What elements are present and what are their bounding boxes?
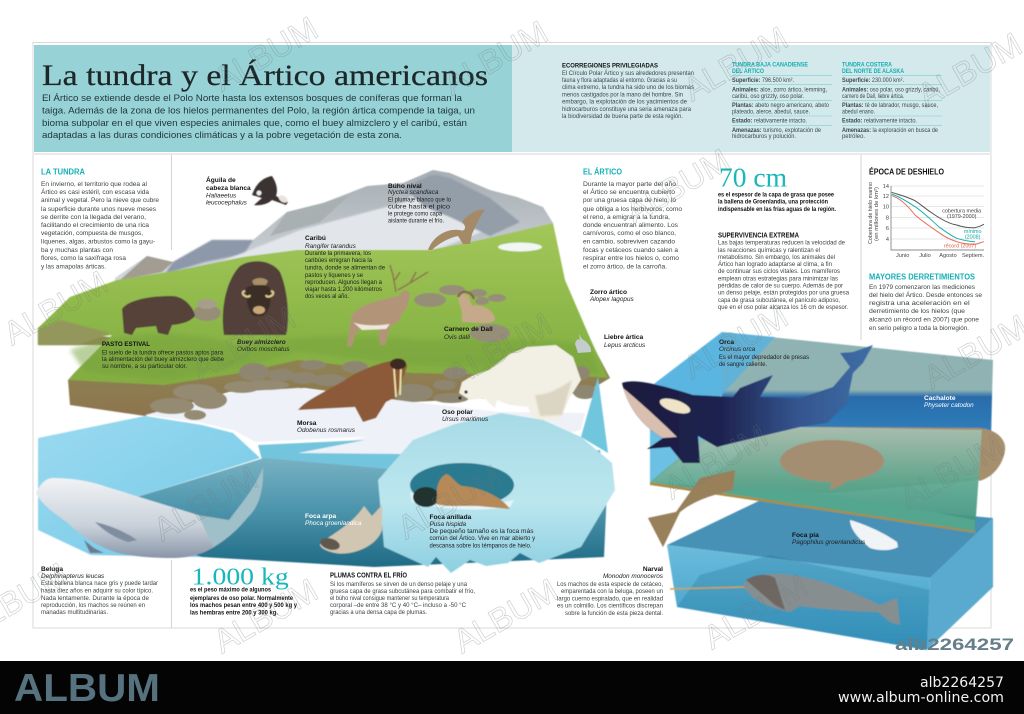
table: tundra baja canadiense: plateado, alerce, abedul, sauce. [732, 109, 810, 116]
label: narval: es un colmillo. Los científicos discrepan [557, 602, 663, 610]
label: orca: Orca [719, 339, 734, 346]
text: ecorregiones privilegiadas: El Círculo Polar Ártico y sus alrededores presentan [562, 68, 694, 77]
snow shelf [145, 388, 585, 456]
label: caribu: reproducen. Algunos llegan a [305, 279, 382, 286]
label: foca pia [792, 532, 866, 546]
label: foca anillada: Pusa hispida [430, 521, 467, 528]
label: narval: Los machos de esta especie de cetáceo, [557, 581, 663, 588]
chart: epoca de deshielo: Julio [919, 253, 931, 259]
page frame [33, 42, 991, 628]
label: buho nival: Nyctea scandiaca [388, 189, 439, 196]
chart: epoca de deshielo: (1979-2000) [947, 214, 977, 220]
text: plumas contra el frio: Si los mamíferos se sirven de un denso pelaje y una [330, 581, 467, 588]
text: ecorregiones privilegiadas: hidrocarburos constituye una seria amenaza para [562, 106, 691, 113]
text: mayores derretimientos: del hielo del Ártico. Desde entonces se [869, 290, 982, 299]
label: buho nival: cubre hasta el pico [388, 204, 451, 211]
watermarks: ALBUM [207, 571, 324, 660]
text: supervivencia extrema: un denso pelaje, están protegidos por una gruesa [718, 290, 849, 296]
text: ecorregiones privilegiadas: la biodiversidad de buena parte de esta región. [562, 113, 683, 120]
label: caribu: Rangifer tarandus [305, 243, 357, 250]
label: beluga: hasta diez años en adquirir su color típico. [41, 588, 153, 594]
chart: epoca de deshielo: récord (2007) [944, 244, 976, 250]
chart: epoca de deshielo: 8 [886, 216, 889, 222]
shore rocks [239, 360, 597, 403]
text: ecorregiones privilegiadas: fauna y flora adaptadas al entorno. Gracias a su [562, 77, 677, 84]
label: pasto estival [102, 341, 224, 370]
chart: epoca de deshielo: cobertura media [942, 208, 981, 214]
polar bear [458, 345, 581, 420]
sperm whale [648, 427, 1005, 547]
chart: epoca de deshielo: Septiem. [962, 253, 984, 259]
label: morsa: Odobenus rosmarus [297, 427, 356, 434]
seabed [650, 427, 982, 531]
caribou [347, 265, 428, 346]
text: plumas contra el frio: el búho nival consigue mantener su temperatura [330, 595, 449, 602]
label: caribu: tundra, donde se alimentan de [305, 264, 385, 272]
top block surface and left wall [650, 332, 722, 482]
label: el artico text: carnívoros, como el oso blanco, [583, 230, 676, 237]
watermarks: ALBUM [619, 141, 736, 230]
text: supervivencia extrema: que en el oso polar alcanza los 16 cm de espesor. [718, 304, 848, 311]
table: tundra costera: carnero de Dall, liebre ártica. [842, 93, 904, 100]
label: orca: Orcinus orca [719, 346, 756, 353]
label: el artico text: el reno, a emigrar a la tundra, [583, 214, 670, 221]
table: tundra costera: petróleo. [842, 133, 865, 140]
watermarks: ALBUM [207, 9, 324, 98]
deep water section [137, 450, 607, 567]
whale tail outside water [648, 470, 735, 547]
label: foca pia: Pagophilus groenlandicus [792, 539, 866, 546]
label: foca arpa: Phoca groenlandica [305, 520, 362, 527]
table: tundra baja canadiense: DEL ÁRTICO [732, 66, 764, 75]
label: el artico text: respirar entre los hielos o, como [583, 255, 679, 262]
label: el artico text: Durante la mayor parte del año [583, 181, 676, 188]
label: buho nival: El plumaje blanco que lo [388, 197, 451, 204]
orca [622, 345, 873, 463]
stat: 1.000 kg: es el peso máximo de algunos [190, 586, 271, 594]
stat: 1.000 kg: ejemplares de oso polar. Normalmente [190, 595, 293, 602]
label: buho nival: aislante durante el frío. [388, 218, 444, 225]
table: tundra costera: Superficie: 230.000 km². [842, 77, 904, 84]
table: tundra costera [842, 62, 942, 140]
watermarks: ALBUM [893, 427, 1010, 516]
stat: 1.000 kg: las hembras entre 200 y 300 kg. [190, 610, 278, 616]
footer bar [0, 661, 1024, 714]
cave shadow [413, 487, 439, 507]
panel: ecoregions background [512, 45, 990, 152]
intro text: bioma subpolar en el que viven especies animales que, como el buey almizclero y el caribú, están [42, 118, 467, 129]
label: carnero de dall: Carnero de Dall [444, 326, 493, 333]
harp seal pup [850, 520, 898, 550]
label: foca anillada: Foca anillada [430, 514, 472, 521]
text: mayores derretimientos: registra una aceleración en el [869, 300, 970, 307]
illustration: tundra and arctic shore [36, 170, 615, 573]
image id over artwork: alb2264257 [895, 635, 1014, 654]
header band [34, 45, 990, 152]
lower rocks [150, 380, 289, 420]
label: foca anillada: descansa sobre los témpanos de hielo. [430, 543, 532, 550]
footer logo: ALBUM [14, 667, 160, 710]
label: caribu [305, 235, 385, 300]
label: cachalote: Physeter catodon [924, 402, 974, 409]
table: tundra baja canadiense: Estado: relativamente intacto. [732, 118, 807, 125]
text: mayores derretimientos [869, 271, 982, 332]
label: narval: largo cuerno espiralado, que en realidad [557, 596, 663, 602]
label: el artico text: que obliga a los herbívoros, como [583, 206, 682, 213]
label: aguila: leucocephalus [206, 200, 248, 206]
label: beluga: Delphinapterus leucas [41, 573, 105, 580]
label: orca: Es el mayor depredador de presas [719, 354, 809, 361]
label: la tundra text: LA TUNDRA [41, 167, 85, 177]
label: pasto estival: la alimentación del buey almizclero que debe [102, 356, 224, 363]
chart heading: ÉPOCA DE DESHIELO [869, 168, 944, 177]
label: el artico text: el Ártico se encuentra cubierto [583, 187, 675, 196]
intro text: adaptadas a las duras condiciones climáticas y a la pobre vegetación de esta zona. [42, 130, 402, 141]
grass [38, 223, 608, 385]
label: caribu: caribúes emigran hacia la [305, 257, 372, 264]
chart: epoca de deshielo: mínimo [964, 229, 982, 235]
table: tundra costera: Plantas: té de labrador, musgo, sauce, [842, 102, 938, 109]
narwhal [670, 574, 900, 625]
label: la tundra text: ba y muchas plantas con [41, 247, 113, 254]
label: foca arpa: Foca arpa [305, 513, 336, 520]
text: plumas contra el frio [330, 570, 475, 616]
label: buey almizclero: Buey almizclero [237, 339, 286, 346]
text: supervivencia extrema: capa de grasa subcutánea, el panículo adiposo, [718, 297, 840, 304]
label: foca anillada [430, 514, 536, 550]
table: tundra baja canadiense: caribú, oso grizzly, oso polar. [732, 93, 804, 100]
label: narval: emparentada con la beluga, poseen un [561, 588, 663, 595]
text: mayores derretimientos: derretimiento de los hielos (que [869, 308, 965, 315]
top block back wall [722, 332, 993, 470]
eagle [252, 176, 289, 205]
label: liebre artica: Liebre ártica [604, 334, 644, 341]
label: la tundra text: Ártico es casi estéril, con escasa vida [41, 187, 149, 196]
label: la tundra text: líquenes, algas, arbustos como la gayu- [41, 238, 155, 246]
label: la tundra text: animal y vegetal. Pero la nieve que cubre [41, 197, 159, 204]
label: caribu: Caribú [305, 235, 326, 242]
label: narval [557, 566, 664, 617]
owl [428, 210, 485, 250]
label: morsa: Morsa [297, 420, 317, 427]
illustration: ocean layers [622, 332, 1005, 650]
label: orca [719, 339, 809, 368]
label: buho nival [388, 183, 451, 225]
label: oso polar [442, 409, 489, 423]
label: carnero de dall: Ovis dalli [444, 334, 471, 341]
beluga [36, 467, 263, 558]
label: narval: sobre la función de esta pieza dental. [565, 610, 663, 617]
label: la tundra text: se derrite con la llegada del verano, [41, 214, 146, 221]
text: supervivencia extrema: Ártico han logrado adaptarse al clima, a fin [718, 259, 832, 268]
table: tundra baja canadiense: Superficie: 796.500 km². [732, 77, 794, 84]
label: foca arpa [305, 513, 362, 527]
label: orca: de sangre caliente. [719, 361, 767, 368]
curve: minimum 2008 [892, 194, 975, 242]
table: tundra costera: Amenazas: la exploración en busca de [842, 127, 938, 134]
text: supervivencia extrema [718, 230, 849, 311]
label: cachalote [924, 395, 974, 409]
label: narval: Monodon monoceros [603, 573, 664, 580]
stat: 70 cm: 70 cm [719, 163, 787, 193]
label: buey almizclero: Ovibos moschatus [237, 346, 290, 353]
lower block right wall [927, 518, 993, 650]
text: mayores derretimientos: en serio peligro a toda la biorregión. [869, 325, 969, 332]
lower block top face [667, 497, 993, 578]
watermarks: ALBUM [697, 567, 814, 656]
grass shading [70, 334, 600, 380]
lower block front [667, 545, 930, 650]
walrus [298, 358, 407, 422]
label: cachalote: Cachalote [924, 395, 956, 402]
text: plumas contra el frio: gruesa capa de grasa subcutánea para combatir el frío, [330, 588, 475, 595]
label: foca anillada: común del Ártico. Vive en mar abierto y [430, 533, 536, 542]
text: supervivencia extrema: las reacciones químicas y ralentizan el [718, 247, 820, 254]
watermarks: ALBUM [447, 571, 564, 660]
text: mayores derretimientos: En 1979 comenzaron las mediciones [869, 284, 976, 291]
chart: epoca de deshielo: 10 [883, 205, 889, 211]
label: caribu: viajar hasta 1.200 kilómetros [305, 286, 382, 293]
table: tundra costera: Animales: oso polar, oso grizzly, caribú, [842, 86, 940, 94]
label: el artico text: EL ÁRTICO [583, 167, 622, 177]
table: tundra baja canadiense: Plantas: abeto negro americano, abeto [732, 102, 829, 109]
arctic hare [575, 334, 591, 353]
label: beluga: Beluga [41, 566, 63, 573]
snow patch on grass [498, 242, 542, 252]
table: tundra costera: DEL NORTE DE ALASKA [842, 68, 904, 75]
stat: 70 cm: la ballena de Groenlandia, una protección [718, 198, 828, 206]
text: plumas contra el frio: corporal –de entre 38 °C y 40 °C– incluso a -50 °C [330, 601, 466, 609]
label: beluga: manadas multitudinarias. [41, 609, 108, 616]
label: zorro artico [589, 289, 635, 303]
stat: 1.000 kg: los machos pesan entre 400 y 500 kg y [190, 602, 297, 609]
label: zorro artico: Zorro ártico [590, 289, 627, 296]
harp seal [319, 505, 382, 554]
upper rocks [193, 285, 510, 342]
seabed lower strip [650, 482, 975, 531]
label: la tundra text: la superficie durante unos nueve meses [41, 206, 157, 213]
label: el artico text [583, 167, 682, 270]
label: beluga: Esta ballena blanca nace gris y puede tardar [41, 580, 159, 587]
watermarks: ALBUM [391, 457, 508, 546]
label: liebre artica [604, 334, 646, 349]
text: supervivencia extrema: emplean otras estrategias para minimizar las [718, 276, 839, 282]
mountains [115, 170, 553, 295]
water surface [38, 416, 260, 557]
text: mayores derretimientos: alcanzó un récord en 2007) que pone [869, 316, 979, 324]
label: el artico text: donde encuentran alimento. Los [583, 222, 679, 229]
dall sheep [458, 292, 495, 323]
ice cave [410, 463, 514, 507]
cave floor [410, 492, 514, 510]
label: el artico text: por una gruesa capa de hielo, lo [583, 197, 676, 204]
intro text [42, 93, 475, 141]
chart: epoca de deshielo: Junio [896, 253, 909, 259]
watermarks: ALBUM [147, 459, 264, 548]
label: pasto estival: El suelo de la tundra ofrece pastos aptos para [102, 350, 223, 356]
label: buho nival: Búho nival [388, 183, 422, 190]
label: oso polar: Oso polar [442, 409, 473, 416]
label: la tundra text: En invierno, el territorio que rodea al [41, 181, 148, 188]
stat: 70 cm [718, 163, 836, 213]
label: caribu: Durante la primavera, los [305, 250, 371, 257]
whale flipper [830, 473, 860, 490]
intro text: taiga. Además de la zona de los hielos permanentes del Polo, la región ártica compende la taiga, un [42, 106, 475, 116]
seabed sand edge [650, 482, 975, 533]
label: la tundra text: flores, como la saxífraga rosa [41, 255, 126, 262]
label: carnero de dall [444, 326, 493, 341]
chart: epoca de deshielo: Cobertura de hielo marino [868, 182, 874, 244]
stat: 1.000 kg: 1.000 kg [192, 564, 289, 590]
label: el artico text: en cambio, sobreviven cazando [583, 238, 675, 246]
table: tundra baja canadiense: Animales: alce, zorro ártico, lemming, [732, 86, 827, 94]
table: tundra costera: TUNDRA COSTERA [842, 62, 892, 69]
musk ox large [223, 261, 288, 335]
title: La tundra y el Ártico americanos [42, 59, 488, 92]
label: aguila: cabeza blanca [206, 185, 251, 192]
blue channel band [258, 440, 401, 470]
label: zorro artico: Alopex lagopus [589, 296, 635, 303]
label: beluga [41, 566, 159, 616]
label: buey almizclero [237, 339, 290, 353]
label: caribu: pastos y líquenes y se [305, 272, 363, 279]
chart: epoca de deshielo: 4 [886, 237, 889, 243]
label: foca anillada: De pequeño tamaño es la foca más [430, 528, 534, 535]
label: buho nival: le protege como capa [388, 211, 442, 218]
panel: title background [34, 45, 512, 152]
soil block [38, 330, 610, 416]
label: pasto estival: su nombre, a su particular olor. [102, 363, 187, 370]
label: la tundra text: facilitando el crecimiento de una rica [41, 222, 149, 229]
text: ecorregiones privilegiadas [562, 62, 694, 120]
footer url: www.album-online.com [838, 690, 1004, 706]
label: caribu: dos veces al año. [305, 293, 349, 300]
iceberg [378, 413, 615, 573]
footer image id: alb2264257 [920, 675, 1004, 691]
text: ecorregiones privilegiadas: clima extremo, la tundra ha sido uno de los biomas [562, 84, 694, 91]
text: ecorregiones privilegiadas: embargo, la explotación de los yacimientos de [562, 98, 687, 106]
text: supervivencia extrema: metabolismo. Sin embargo, los animales del [718, 254, 835, 261]
watermarks: ALBUM [657, 417, 774, 506]
label: la tundra text [41, 167, 159, 270]
chart: epoca de deshielo: 12 [883, 194, 889, 200]
chart: epoca de deshielo: (2008) [965, 234, 981, 240]
table: tundra baja canadiense: Amenazas: turismo, explotación de [732, 127, 821, 134]
lower block inner shade [677, 555, 930, 650]
label: morsa [297, 420, 356, 434]
table: tundra baja canadiense: TUNDRA BAJA CANADIENSE [732, 62, 809, 69]
text: mayores derretimientos: MAYORES DERRETIMIENTOS [869, 271, 975, 281]
stat: 70 cm: es el espesor de la capa de grasa que posee [718, 192, 834, 198]
text: plumas contra el frio: gracias a una densa capa de plumas. [330, 609, 427, 616]
watermarks: ALBUM [441, 305, 558, 394]
text: supervivencia extrema: Las bajas temperaturas reducen la velocidad de [718, 240, 845, 246]
stat: 70 cm: indispensable en las frías aguas de la región. [718, 206, 836, 213]
left soil patch [38, 320, 110, 345]
text: ecorregiones privilegiadas: menos castigados por la mano del hombre. Sin [562, 92, 683, 98]
label: beluga: reproducción, los machos se reúnen en [41, 602, 145, 609]
label: foca pia: Foca pía [792, 532, 819, 539]
text: supervivencia extrema: pérdidas de calor de su cuerpo. Además de por [718, 282, 844, 290]
intro text: El Ártico se extiende desde el Polo Norte hasta los extensos bosques de coníferas que forman la [42, 93, 463, 104]
watermarks: ALBUM [677, 297, 794, 386]
watermarks: ALBUM [185, 299, 302, 388]
table: tundra costera: abedul enano. [842, 109, 875, 116]
text: supervivencia extrema: SUPERVIVENCIA EXTREMA [718, 230, 800, 239]
whale body patch [780, 440, 884, 482]
watermarks: ALBUM [437, 13, 554, 102]
label: narval: Narval [643, 566, 663, 573]
chart: epoca de deshielo: Agosto [939, 253, 957, 259]
ice wall right [581, 377, 608, 453]
whale head outside water [979, 430, 1005, 481]
ringed seal [436, 474, 510, 509]
text: ecorregiones privilegiadas: ECORREGIONES PRIVILEGIADAS [562, 62, 658, 70]
text: supervivencia extrema: de continuar sus ciclos vitales. Los mamíferos [718, 268, 841, 275]
label: oso polar: Ursus maritimus [442, 416, 489, 423]
label: el artico text: el zorro ártico, de la carroña. [583, 264, 667, 270]
curve: record 2007 [892, 196, 984, 244]
watermarks: ALBUM [677, 19, 794, 108]
table: tundra baja canadiense [732, 62, 832, 140]
text: plumas contra el frio: PLUMAS CONTRA EL FRÍO [330, 570, 407, 579]
table: tundra baja canadiense: hidrocarburos y polución. [732, 133, 796, 140]
label: la tundra text: y las amapolas árticas. [41, 264, 106, 270]
label: liebre artica: Lepus arcticus [604, 342, 646, 349]
chart: epoca de deshielo [868, 168, 984, 259]
musk ox small [122, 296, 195, 335]
curve: average coverage [892, 192, 984, 228]
label: beluga: Nada lentamente. Durante la época de [41, 595, 149, 602]
label: pasto estival: PASTO ESTIVAL [102, 341, 150, 348]
chart: epoca de deshielo: (en millones de km²) [874, 187, 880, 241]
label: el artico text: focas y cetáceos cuando salen a [583, 247, 678, 254]
label: la tundra text: vegetación, compuesta de musgos, [41, 230, 143, 237]
table: tundra costera: Estado: relativamente intacto. [842, 118, 917, 125]
label: aguila [206, 175, 251, 206]
label: aguila: Águila de [206, 175, 236, 184]
stat: 1.000 kg [190, 564, 297, 616]
watermarks: ALBUM [0, 263, 114, 352]
chart: epoca de deshielo: 14 [883, 184, 889, 190]
label: aguila: Haliaeetus [206, 192, 237, 200]
chart: epoca de deshielo: 6 [886, 226, 889, 232]
